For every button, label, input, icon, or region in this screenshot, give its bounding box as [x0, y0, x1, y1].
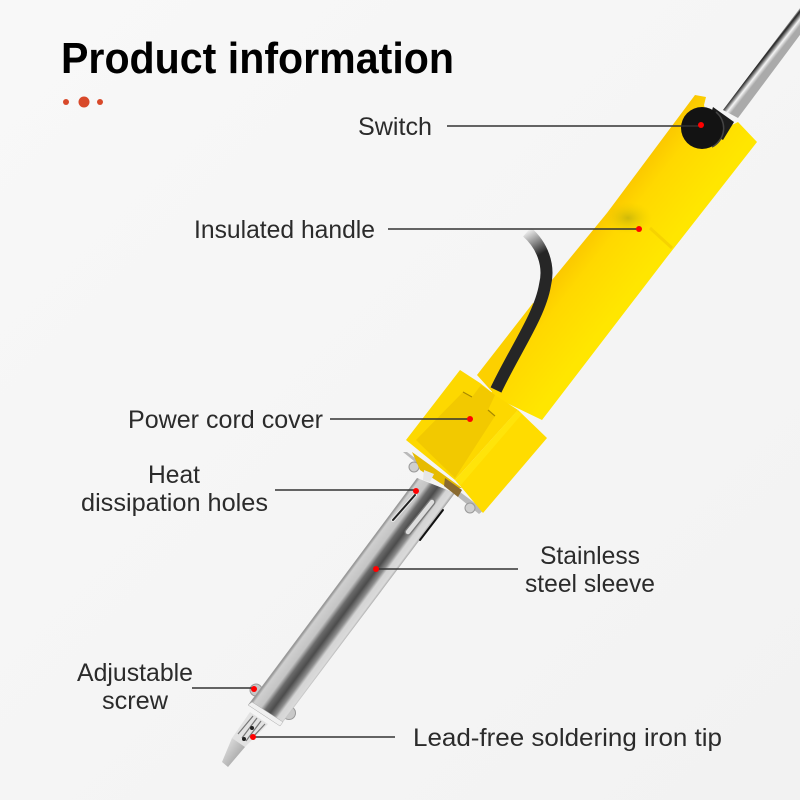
lead-free tip — [222, 712, 268, 767]
power cord cover — [406, 370, 547, 513]
callout: stainless steel sleeve: Stainless — [540, 542, 640, 570]
heat dissipation slots — [393, 495, 443, 540]
callout: adjustable screw: screw — [102, 687, 169, 715]
callout: adjustable screw — [77, 659, 257, 715]
heating rod — [723, 0, 800, 118]
callout: insulated handle: Insulated handle — [194, 216, 375, 244]
callout: insulated handle — [194, 216, 642, 244]
callout: switch — [358, 113, 704, 141]
title: Product information — [61, 34, 454, 83]
callout: heat dissipation holes: Heat — [148, 461, 200, 489]
callout: heat dissipation holes: dissipation holes — [81, 489, 268, 517]
stainless steel sleeve — [248, 478, 455, 726]
callout: stainless steel sleeve — [373, 542, 655, 598]
callout: lead-free soldering iron tip: Lead-free soldering iron tip — [413, 724, 722, 752]
mounting flange — [403, 452, 484, 514]
callout: power cord cover — [128, 406, 473, 434]
callout: switch: Switch — [358, 113, 432, 141]
sleeve collar — [248, 702, 283, 726]
callout: lead-free soldering iron tip — [250, 724, 722, 752]
adjustable screws — [250, 684, 296, 720]
callout: adjustable screw: Adjustable — [77, 659, 193, 687]
callout: heat dissipation holes — [81, 461, 419, 517]
ribbed handle section left of cable — [477, 303, 545, 395]
insulated handle — [490, 95, 757, 420]
soldering iron illustration — [222, 0, 800, 767]
power cable — [496, 232, 546, 390]
callout: stainless steel sleeve: steel sleeve — [525, 570, 655, 598]
callout: power cord cover: Power cord cover — [128, 406, 323, 434]
switch — [681, 107, 734, 149]
decorative title dots — [63, 96, 103, 108]
